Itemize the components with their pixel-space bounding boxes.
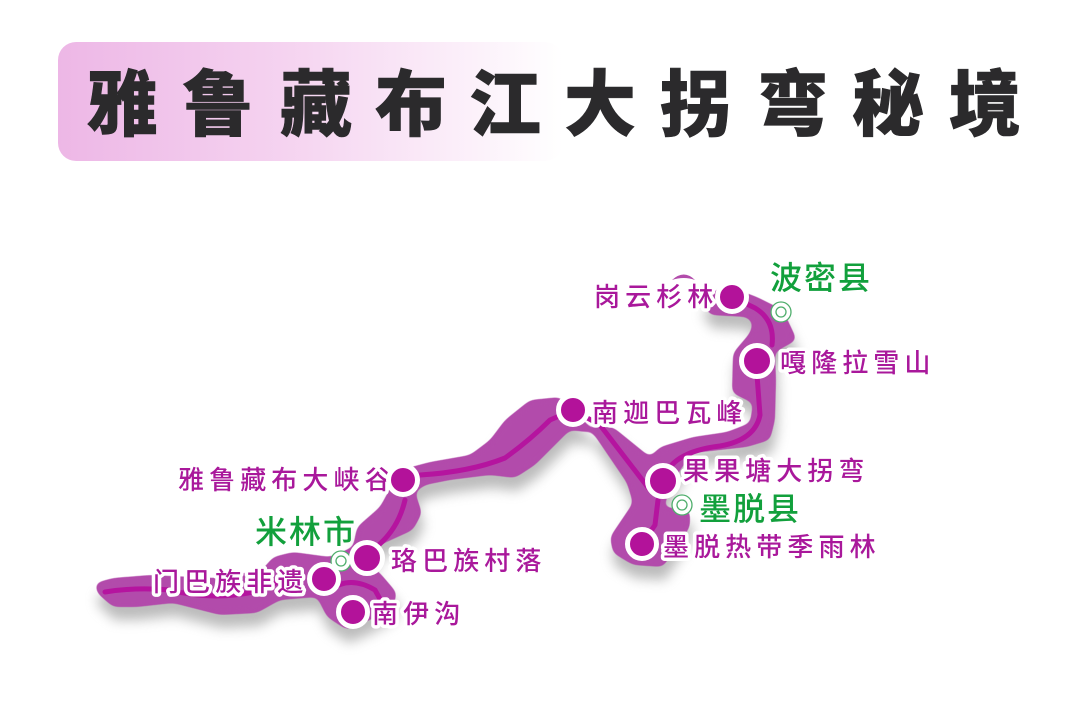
marker: Bomi: [771, 302, 791, 322]
label: Grand Canyon: 雅鲁藏布大峡谷: [178, 465, 396, 495]
river body: [95, 285, 797, 630]
label: Bomi County: 波密县: [770, 260, 872, 296]
marker: Medog: [672, 495, 692, 515]
county markers: [331, 302, 791, 571]
label: Namcha Barwa: 南迦巴瓦峰: [592, 398, 748, 428]
dot: Namcha Barwa: [558, 396, 588, 424]
dot: Medog rainforest: [628, 530, 656, 558]
label: Galongla: 嘎隆拉雪山: [780, 348, 936, 378]
title text: 拐: [660, 66, 732, 146]
dot: Guoguotang: [648, 466, 678, 496]
label: Gangyun: 岗云杉林: [594, 282, 718, 312]
title text: 境: [949, 66, 1021, 146]
title background: [58, 42, 563, 161]
dot: Gangyun: [718, 282, 746, 312]
dot: Nanyi Valley: [338, 598, 368, 626]
marker: Mainling: [331, 551, 351, 571]
scenic spot labels: [153, 282, 936, 629]
county labels: [255, 260, 872, 550]
label: Monba heritage: 门巴族非遗: [153, 567, 309, 597]
label: Medog County: 墨脱县: [699, 491, 801, 527]
dot: Lhoba village: [352, 542, 382, 574]
river shadow: [97, 298, 799, 643]
title text: 秘: [852, 66, 924, 146]
label: Medog rainforest: 墨脱热带季雨林: [663, 532, 881, 562]
title text: 雅: [86, 66, 158, 146]
scenic spot dots: [310, 282, 772, 626]
title text: 大: [564, 66, 636, 146]
title text: 藏: [280, 66, 352, 146]
label: Lhoba village: 珞巴族村落: [391, 546, 547, 576]
dot: Grand Canyon: [388, 466, 418, 494]
title banner: [58, 42, 1021, 161]
river center line: [105, 297, 772, 608]
label: Guoguotang: 果果塘大拐弯: [683, 456, 870, 486]
river map: [95, 274, 799, 643]
label: Mainling City: 米林市: [255, 514, 357, 550]
title text: 鲁: [182, 66, 254, 146]
title text: 布: [375, 66, 447, 146]
river arc near Gangyun: [672, 274, 695, 280]
title text: 江: [469, 66, 541, 146]
dot: Galongla: [742, 346, 772, 376]
title text: 弯: [757, 66, 829, 146]
label: Nanyi Valley: 南伊沟: [372, 599, 465, 629]
title text: [86, 66, 1021, 146]
dot: Monba heritage: [310, 564, 338, 594]
